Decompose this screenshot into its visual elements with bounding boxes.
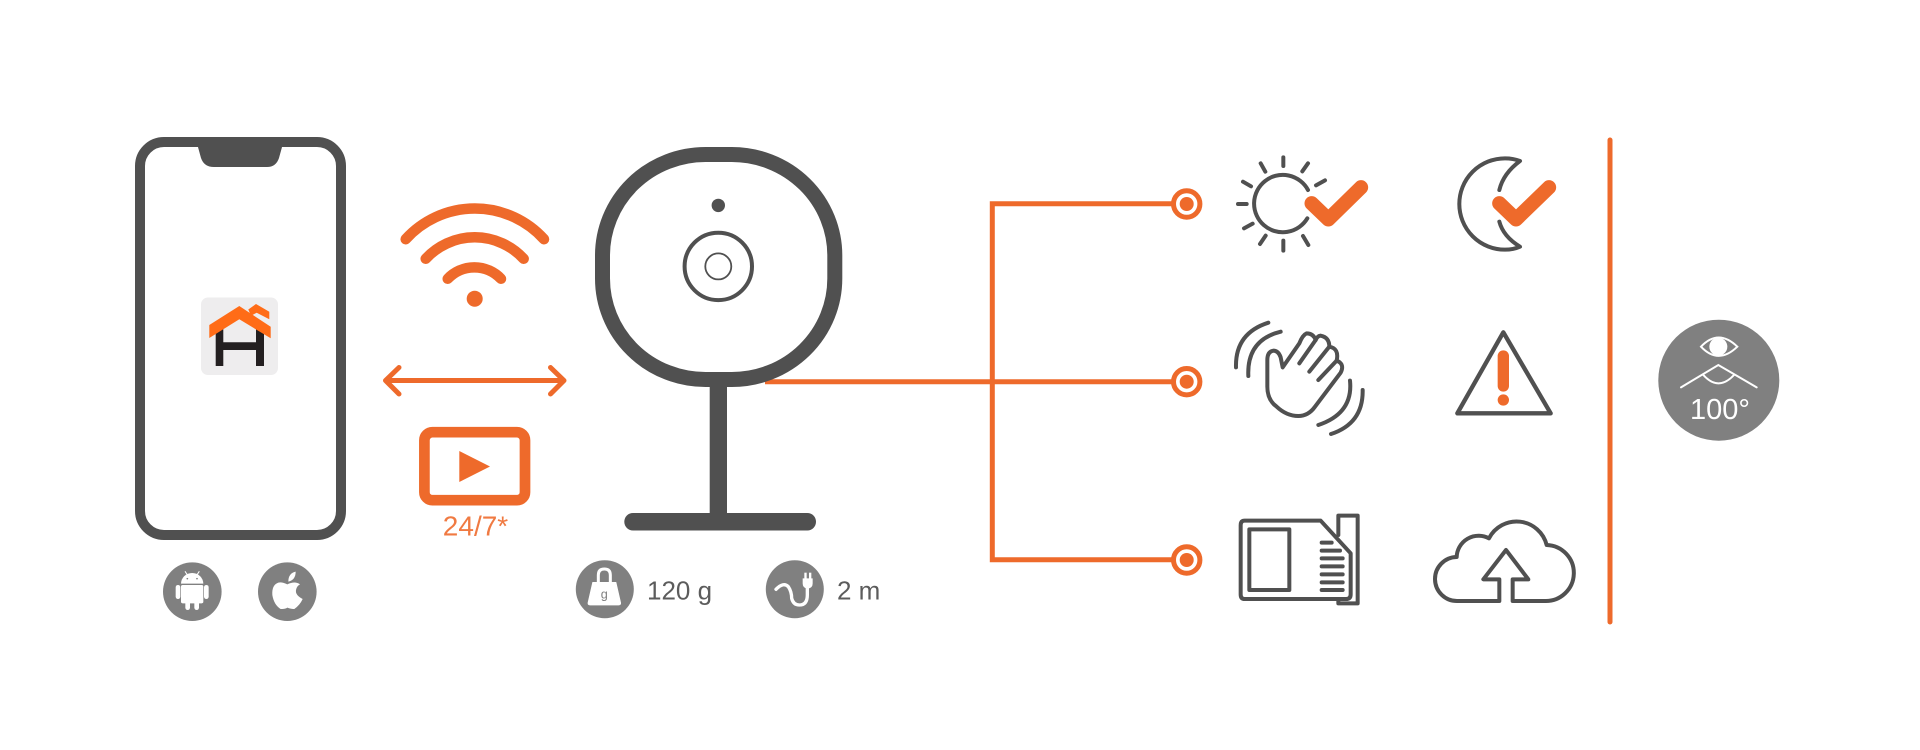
icon: cloud upload <box>1435 521 1574 601</box>
divider line <box>1608 140 1612 622</box>
badge: 100 degree field of view <box>1658 320 1779 441</box>
node: top connector <box>1174 191 1200 217</box>
icon: weight: g <box>601 588 608 602</box>
icon: day vision <box>1238 157 1361 251</box>
icon: alert triangle <box>1457 332 1551 413</box>
icon: cable <box>766 560 824 618</box>
label: weight: 120 g <box>647 575 712 605</box>
app icon <box>201 298 278 375</box>
connector lines <box>765 204 1172 560</box>
icon: video stream <box>424 432 525 500</box>
node: middle connector <box>1174 368 1200 395</box>
label: cable length: 2 m <box>837 575 880 605</box>
icon: wifi <box>406 209 544 307</box>
icon: memory card <box>1241 516 1358 603</box>
phone <box>140 142 341 535</box>
icon: motion detection hand <box>1236 323 1363 434</box>
icon: night vision <box>1459 158 1549 250</box>
icon: apple <box>258 562 317 621</box>
node: bottom connector <box>1174 547 1200 573</box>
badge: 100 degree field of view: 100° <box>1690 394 1750 426</box>
icon: weight <box>576 560 634 618</box>
label: 24/7: 24/7* <box>443 510 508 541</box>
camera <box>602 154 835 530</box>
arrow: two-way connection <box>386 368 564 394</box>
icon: android <box>163 562 222 621</box>
